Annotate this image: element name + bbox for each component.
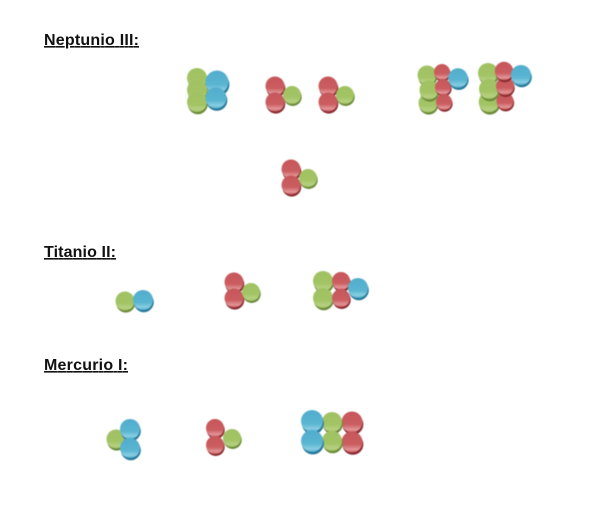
heading: Neptunio III: Neptunio III: [44,32,139,49]
molecule: second green, red and blue cluster [478,62,532,115]
heading: Titanio II: Titanio II: [44,244,116,261]
molecule: Mercurio I blue, green and red cluster [301,410,363,455]
molecule: first green, red and blue cluster [418,64,469,115]
molecule: Titanio II red and green trio [224,272,261,310]
molecule: first red and green trio [266,76,302,114]
molecule: Mercurio I green and blue trio [106,419,141,460]
molecule: Titanio II green and blue pair [116,290,154,313]
molecule: second red and green trio [318,76,355,114]
heading: Mercurio I: Mercurio I: [44,357,128,374]
molecule: lower red and green trio [282,160,318,197]
molecule: Neptunio III green and blue cluster [187,68,229,114]
molecule: Mercurio I red and green trio [206,419,242,456]
molecule: Titanio II green, red and blue cluster [313,271,369,310]
